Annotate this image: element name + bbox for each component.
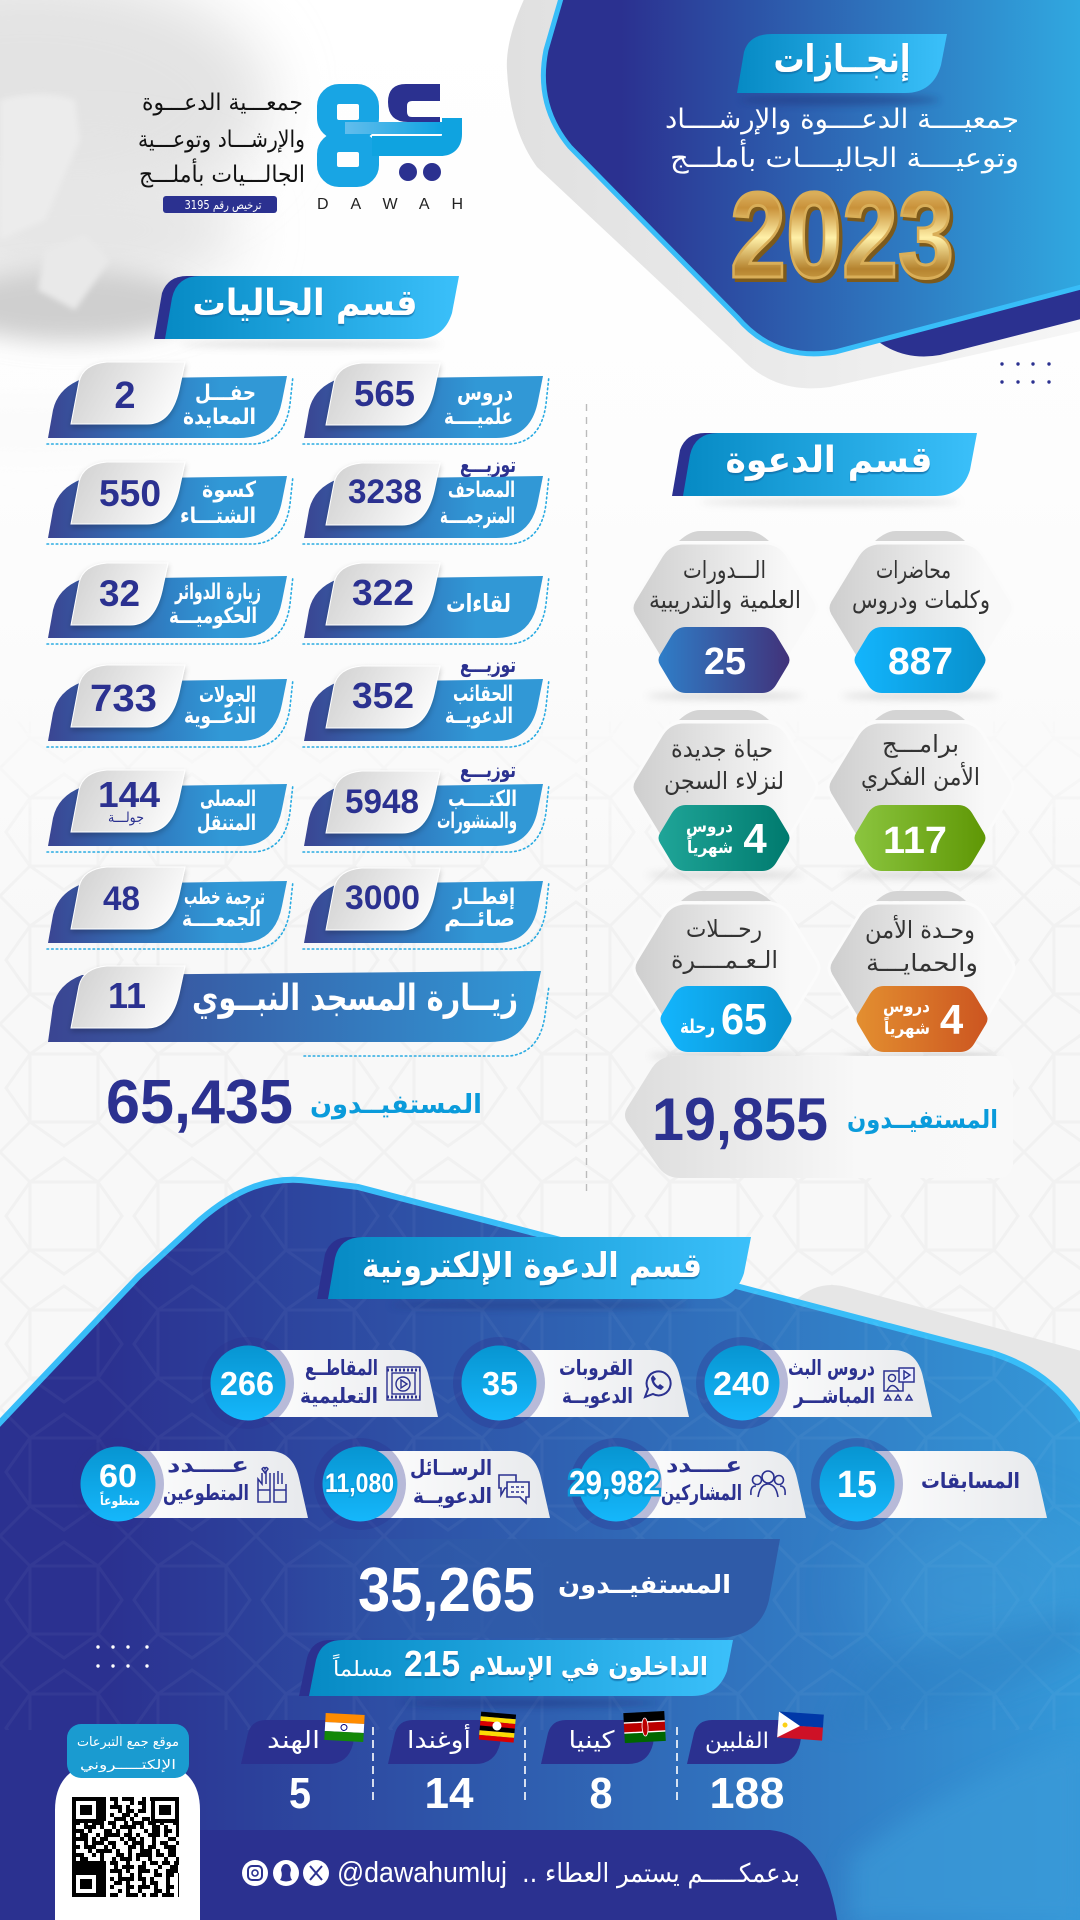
hex card: رحلات العمرة 65 رحلة: رحـــلات [686,915,762,943]
header subtitle [665,104,1019,174]
QR label [67,1724,189,1778]
beneficiaries: الإلكترونية [280,1539,780,1638]
QR label: الإلكتـــــروني [80,1758,176,1773]
converts badge: الداخلون في الإسلام [469,1652,708,1682]
card: المصلى المتنقل 144 جولة: 144 [98,774,160,815]
hex card: الدورات 25 [632,531,817,698]
hex card: وحدة الأمن والحماية 4 دروس شهرياً: دروس [883,997,930,1017]
header panel [507,0,1080,388]
card: توزيع الحقائب الدعوية 352: الدعويــة [445,704,513,729]
converts badge: مسلماً [333,1653,393,1681]
hex card: وحدة الأمن والحماية 4 دروس شهرياً: شهرياً [884,1015,930,1039]
stat: عدد المشاركين 29,982: 29,982 [569,1464,660,1501]
footer bar: بدعمكـــــم يستمر العطاء .. [522,1859,800,1889]
hex card: رحلات العمرة 65 رحلة: 65 [721,995,767,1044]
card: لقاءات 322 [303,563,549,644]
stat: عدد المتطوعين 60 متطوعاً: 60 [99,1458,137,1494]
stat: الرسائل الدعوية 11,080: الرســائل [410,1456,492,1480]
stat: المقاطع التعليمية 266: التعليمية [300,1384,378,1408]
beneficiaries: الجاليات: 65,435 [106,1068,293,1137]
icon: instagram [242,1860,268,1886]
logo text [138,90,305,188]
card: توزيع الحقائب الدعوية 352: الحقائب [453,682,513,707]
stat: عدد المتطوعين 60 متطوعاً: متطوعاً [100,1491,140,1509]
logo text: الجالـــيات بأملـــج [139,158,305,188]
card: إفطار صائم 3000: 3000 [345,879,420,917]
stat: المسابقات 15: 15 [837,1464,877,1506]
stat: عدد المتطوعين 60 متطوعاً [72,1438,308,1530]
hex card: وحدة الأمن والحماية 4 دروس شهرياً: وحـدة الأمن [865,915,975,944]
stat: المقاطع التعليمية 266: المقاطــع [305,1356,378,1380]
stat: الرسائل الدعوية 11,080: 11,080 [325,1468,394,1498]
hex card: رحلات العمرة 65 رحلة [634,891,819,1058]
stat: المقاطع التعليمية 266 [202,1337,438,1429]
logo mark [317,84,463,213]
logo text: جمعـــية الدعـــوة [142,90,303,116]
hex card: وحدة الأمن والحماية 4 دروس شهرياً: 4 [940,996,964,1043]
icon: volunteers hands [258,1468,286,1502]
card: زيارة المسجد النبوي 11: زيــارة المسجد النبــوي [192,978,518,1019]
section heading: الدعوة الإلكترونية [317,1237,751,1309]
country: أوغندا 14: أوغندا [407,1724,471,1754]
flag: Kenya [623,1711,666,1743]
country: أوغندا 14: 14 [424,1769,474,1818]
hex card: وحدة الأمن والحماية 4 دروس شهرياً [829,891,1014,1058]
background: geometric pattern [0,700,1080,1500]
stat: دروس البث المباشر 240: دروس البث [788,1356,875,1380]
card: المصلى المتنقل 144 جولة: المتنقل [197,811,256,836]
dots bottom left [96,1645,149,1668]
stat: الرسائل الدعوية 11,080: الدعويــة [413,1484,492,1508]
card: المصلى المتنقل 144 جولة [47,770,293,852]
hex card: برامج الأمن الفكري 117 [828,710,1013,878]
card: دروس علمية 565: دروس [457,381,513,406]
year 2023 in gold: 2023 [733,170,957,306]
icon: X [303,1860,329,1886]
card: كسوة الشتاء 550: 550 [99,473,161,514]
hex card: محاضرات 887: محاضرات [876,556,951,584]
card: زيارة المسجد النبوي 11 [48,966,549,1056]
converts badge: 215 [404,1643,460,1684]
card: الجولات الدعوية 733: الجولات [199,683,256,708]
header subtitle: وتوعيــــة الجاليــــات بأملـــج [670,138,1019,174]
card: إفطار صائم 3000 [303,868,549,949]
hex card: الدورات 25: الـــدورات [683,556,766,584]
card: دروس علمية 565 [303,363,549,444]
card: توزيع المصاحف المترجمة 3238 [303,453,549,544]
QR label: موقع جمع التبرعات [77,1735,179,1750]
header badge: إنجــازات [774,37,910,82]
header badge [737,34,947,105]
country: كينيا 8: كينيا [568,1726,615,1754]
card: لقاءات 322: لقاءات [446,589,511,618]
hex card: حياة جديدة 4 دروس شهرياً [632,710,817,878]
card: حفل المعايدة 2: حفـــل [195,381,256,406]
section heading: الجاليات [154,276,459,347]
logo mark: DAWAH [317,196,463,213]
card: توزيع الحقائب الدعوية 352: توزيـــع [460,653,516,677]
card: توزيع الحقائب الدعوية 352 [303,653,549,747]
card: زيارة المسجد النبوي 11: 11 [108,975,146,1016]
grey swoosh behind lower panel [770,1285,1080,1430]
card: توزيع الكتب والمنشورات 5948: والمنشورات [437,809,517,834]
hex card: حياة جديدة 4 دروس شهرياً: حياة جديدة [671,735,773,763]
icon: video film [387,1367,420,1400]
card: لقاءات 322: 322 [352,572,414,613]
hex card: رحلات العمرة 65 رحلة: الـعـمــــرة [671,946,778,974]
beneficiaries: الدعوة: المستفيــدون [847,1105,998,1135]
hex card: حياة جديدة 4 دروس شهرياً: لنزلاء السجن [664,767,784,795]
stat: القروبات الدعوية 35: القروبات [559,1356,633,1380]
card: كسوة الشتاء 550 [47,462,293,544]
hex card: برامج الأمن الفكري 117: برامـــج [882,730,959,758]
icon: live lessons [884,1368,914,1400]
beneficiaries: الجاليات [106,1068,482,1137]
stat: المسابقات 15: المسابقات [921,1469,1020,1493]
country: الفلبين 188: الفلبين [705,1729,769,1754]
card: دروس علمية 565: 565 [354,373,415,414]
stat: القروبات الدعوية 35: الدعويــة [562,1384,633,1408]
beneficiaries: الجاليات: المستفيــدون [310,1090,482,1120]
QR donation panel [55,1724,200,1920]
logo [138,84,463,213]
country: الهند 5: 5 [289,1769,311,1818]
country: كينيا 8 [541,1711,666,1818]
stat: المقاطع التعليمية 266: 266 [220,1365,274,1402]
flag: Philippines [777,1711,824,1741]
country: الفلبين 188: 188 [710,1769,784,1818]
card: حفل المعايدة 2 [47,362,293,444]
card: توزيع الحقائب الدعوية 352: 352 [352,675,414,716]
hex card: برامج الأمن الفكري 117: 117 [883,820,947,862]
card: توزيع الكتب والمنشورات 5948: 5948 [345,783,419,821]
hex card: حياة جديدة 4 دروس شهرياً: شهرياً [687,834,733,858]
card: المصلى المتنقل 144 جولة: المصلى [200,787,256,812]
section heading: الدعوة [672,433,977,505]
footer bar: @dawahumluj [337,1857,507,1889]
lower panel background [0,1170,1080,1920]
section heading: الجاليات: قسم الجاليات [192,283,418,324]
icon: whatsapp [645,1371,671,1397]
hex card: محاضرات 887 [828,531,1013,698]
icon: messages [499,1475,529,1503]
card: دروس علمية 565: علميــــة [444,405,513,430]
card: ترجمة خطب الجمعة 48: 48 [103,880,140,918]
hex card: برامج الأمن الفكري 117: الأمن الفكري [861,762,980,791]
hex card: رحلات العمرة 65 رحلة: رحلة [680,1016,715,1038]
year 2023 in gold: 2023 [730,167,954,303]
card: توزيع الكتب والمنشورات 5948: الكتــــب [448,787,517,812]
hex card: وحدة الأمن والحماية 4 دروس شهرياً: والحمايـــة [866,949,978,977]
flag: India [324,1713,365,1742]
stat: عدد المشاركين 29,982: المشاركين [661,1481,742,1505]
card: توزيع المصاحف المترجمة 3238: المترجمــــة [440,504,515,529]
flag: Uganda [479,1712,516,1743]
background: faded leaf photo [0,0,270,460]
stat: دروس البث المباشر 240: المباشـــر [793,1384,875,1408]
stat: المسابقات 15 [811,1438,1047,1530]
country: أوغندا 14 [388,1712,516,1818]
licence pill [163,196,277,213]
card: توزيع المصاحف المترجمة 3238: المصاحف [448,478,515,503]
stat: القروبات الدعوية 35: 35 [482,1365,518,1402]
icon: snapchat [273,1860,299,1886]
card: ترجمة خطب الجمعة 48: الجمعــــة [182,907,261,932]
stat: دروس البث المباشر 240: 240 [713,1365,770,1402]
licence pill: ترخيص رقم 3195 [184,198,262,213]
hex card: محاضرات 887: 887 [888,641,953,683]
hex card: الدورات 25: العلمية والتدريبية [649,586,801,614]
hex card: حياة جديدة 4 دروس شهرياً: 4 [743,815,767,862]
footer bar [200,1830,838,1920]
converts badge [299,1640,733,1706]
card: الجولات الدعوية 733: 733 [90,678,157,720]
country: الهند 5: الهند [267,1726,320,1754]
card: المصلى المتنقل 144 جولة: جولـــة [108,810,144,826]
country: الهند 5 [241,1713,365,1818]
hex card: الدورات 25: 25 [704,641,746,683]
country: كينيا 8: 8 [590,1769,612,1818]
card: زيارة الدوائر الحكومية 32: الحكوميـــة [169,604,257,629]
card: كسوة الشتاء 550: الشتـــاء [180,504,256,529]
stat: عدد المتطوعين 60 متطوعاً: عــــدد [167,1453,249,1477]
card: ترجمة خطب الجمعة 48: ترجمة خطب [184,885,265,910]
card: حفل المعايدة 2: 2 [114,375,136,417]
card: ترجمة خطب الجمعة 48 [47,867,293,949]
stat: عدد المشاركين 29,982: عــــدد [666,1453,742,1477]
stat: عدد المشاركين 29,982 [569,1438,806,1530]
beneficiaries: الإلكترونية: المستفيــدون [558,1570,731,1600]
stat: الرسائل الدعوية 11,080 [314,1438,550,1530]
card: إفطار صائم 3000: صائــم [444,907,515,932]
card: كسوة الشتاء 550: كسوة [202,478,256,503]
card: الجولات الدعوية 733 [47,665,293,747]
divider [586,404,588,1191]
country: الفلبين 188 [687,1711,824,1818]
hex card: محاضرات 887: وكلمات ودروس [852,586,990,614]
card: زيارة الدوائر الحكومية 32: زيارة الدوائر [174,580,261,605]
card: توزيع المصاحف المترجمة 3238: 3238 [348,473,422,511]
hex card: حياة جديدة 4 دروس شهرياً: دروس [686,817,733,837]
icon: people [751,1471,785,1497]
QR code [72,1797,179,1897]
card: إفطار صائم 3000: إفطــار [452,885,515,910]
dots top right [1000,362,1051,384]
section heading: الدعوة الإلكترونية: قسم الدعوة الإلكترونية [362,1246,702,1286]
card: توزيع المصاحف المترجمة 3238: توزيـــع [460,453,516,477]
card: توزيع الكتب والمنشورات 5948: توزيـــع [460,758,516,782]
beneficiaries: الإلكترونية: 35,265 [358,1556,535,1625]
section heading: الدعوة: قسم الدعوة [726,440,932,481]
stat: عدد المتطوعين 60 متطوعاً: المتطوعين [163,1481,249,1505]
card: زيارة الدوائر الحكومية 32 [47,563,293,644]
card: زيارة الدوائر الحكومية 32: 32 [99,573,140,614]
beneficiaries: الدعوة: 19,855 [652,1086,828,1153]
stat: دروس البث المباشر 240 [696,1337,932,1429]
logo text: والإرشـــاد وتوعـــية [138,127,305,153]
stat: القروبات الدعوية 35 [453,1337,689,1429]
card: توزيع الكتب والمنشورات 5948 [303,758,549,852]
header subtitle: جمعيــــة الدعــــوة والإرشــــاد [665,104,1019,135]
card: حفل المعايدة 2: المعايدة [183,405,256,430]
beneficiaries: الدعوة [625,1056,1013,1178]
card: الجولات الدعوية 733: الدعــوية [184,704,256,729]
